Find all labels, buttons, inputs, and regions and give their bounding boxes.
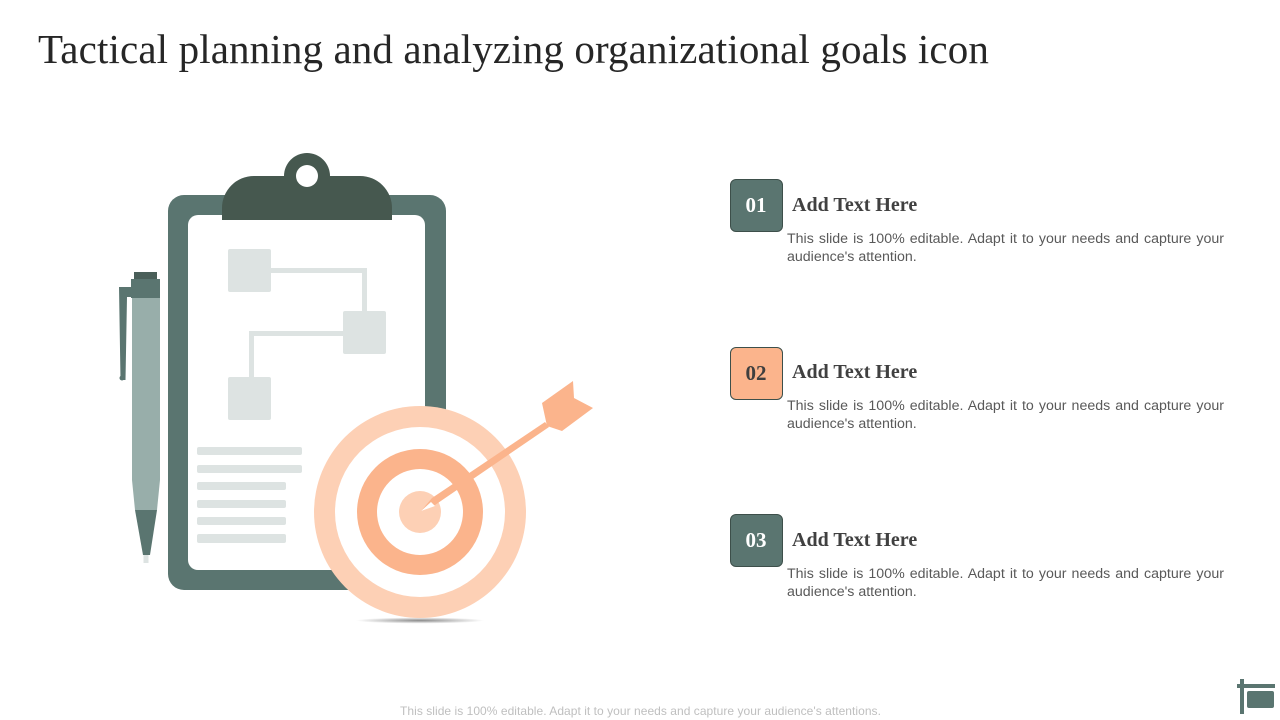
text block 1: This slide is 100% editable. Adapt it to your needs and capture your audience's attention. (787, 231, 1224, 265)
icon: corner sign (1237, 679, 1275, 714)
text block 3: This slide is 100% editable. Adapt it to your needs and capture your audience's attention. (787, 566, 1224, 600)
icon: clipboard (168, 153, 446, 590)
title: Tactical planning and analyzing organizational goals icon (38, 26, 989, 72)
target shadow (356, 618, 484, 624)
heading 2: Add Text Here (792, 361, 917, 383)
heading 1: Add Text Here (792, 194, 917, 216)
badge 01: 01 (746, 193, 766, 217)
icon: target with arrow (314, 381, 593, 618)
text block 2: This slide is 100% editable. Adapt it to your needs and capture your audience's attention. (787, 398, 1224, 432)
text lines (197, 447, 302, 543)
badge 02 (730, 347, 783, 400)
heading 3: Add Text Here (792, 529, 917, 551)
badge 02: 02 (746, 361, 766, 385)
flowchart (228, 249, 386, 420)
badge 01 (730, 179, 783, 232)
footer note: This slide is 100% editable. Adapt it to your needs and capture your audience's attentions. (400, 704, 881, 718)
icon: pen (119, 272, 160, 563)
badge 03 (730, 514, 783, 567)
badge 03: 03 (746, 528, 766, 552)
clipboard clip (222, 153, 392, 220)
